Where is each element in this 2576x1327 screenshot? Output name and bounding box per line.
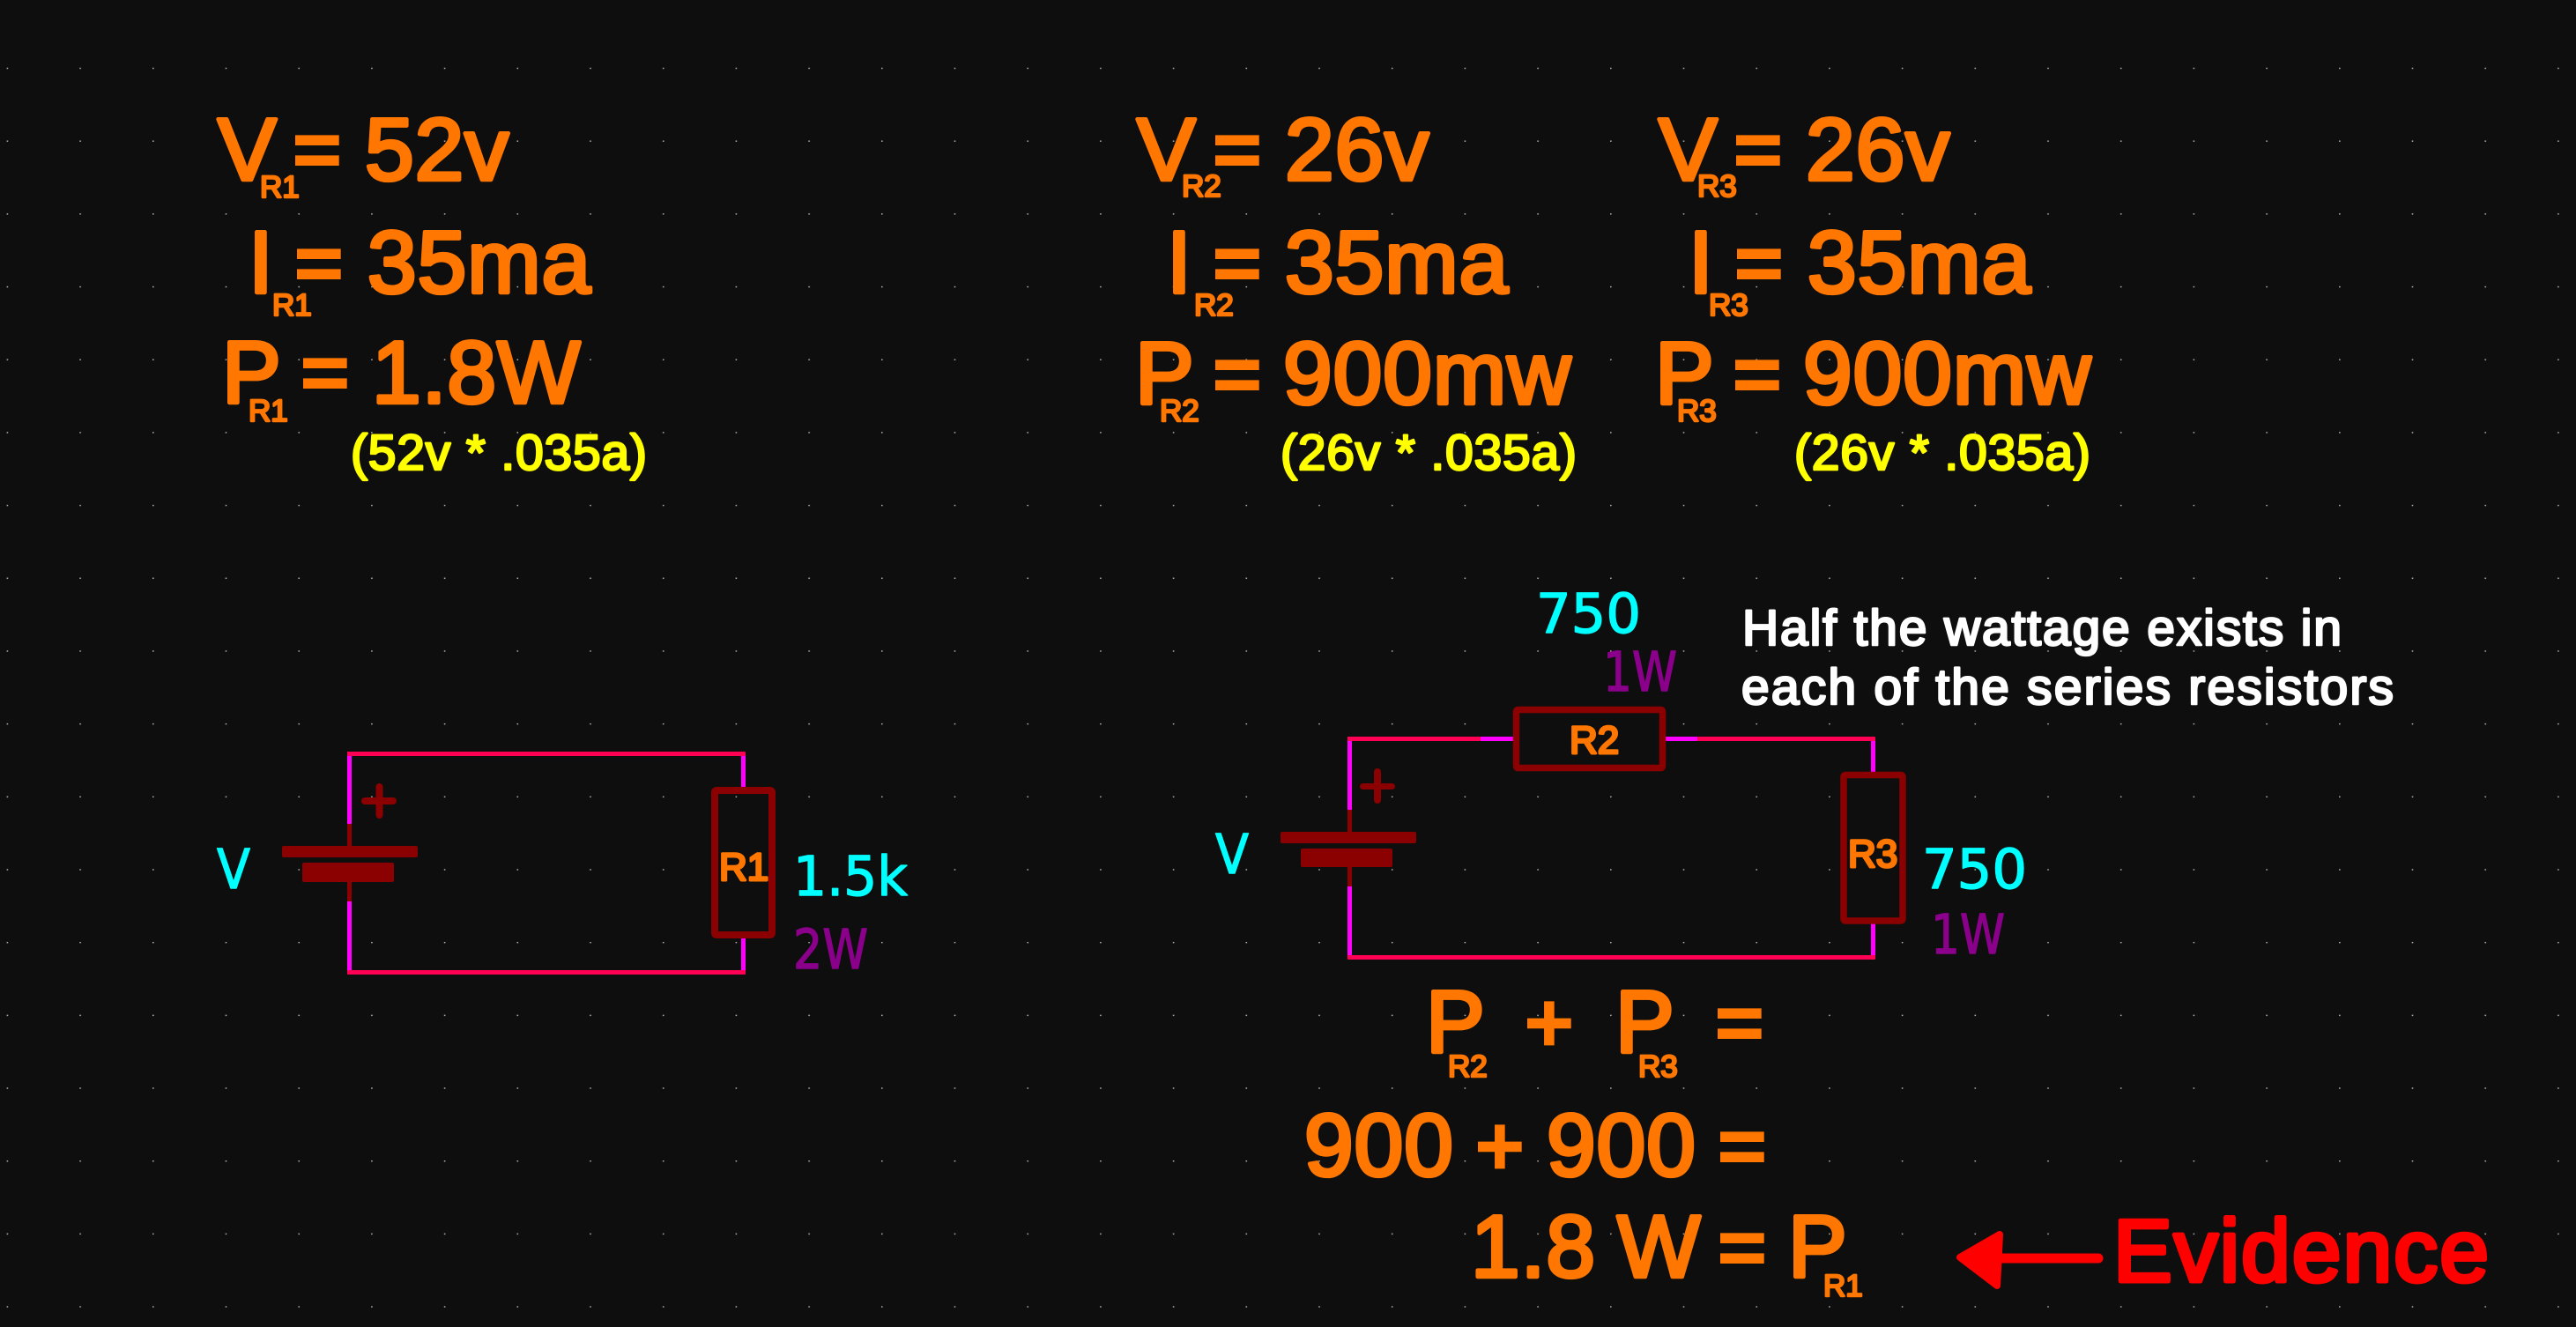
- note: half the wattage: [1741, 600, 2394, 715]
- V R2 equation: R2: [1182, 169, 1221, 204]
- equation: 900 + 900 =: 900: [1547, 1096, 1696, 1195]
- I R3 equation: R3: [1709, 288, 1748, 322]
- icon: battery: [282, 783, 418, 901]
- P R1 equation: R1: [249, 394, 288, 428]
- P R2 equation: [1135, 324, 1571, 428]
- V R1 equation: =: [293, 105, 341, 195]
- note: half the wattage: each of the series resistors: [1741, 659, 2394, 715]
- I R3 equation: [1689, 213, 2031, 322]
- equation: P R2 + P R3 =: R2: [1448, 1049, 1488, 1084]
- V R3 equation: 26v: [1806, 100, 1950, 199]
- P R3 equation: =: [1733, 330, 1781, 419]
- P R1 equation: [222, 323, 581, 428]
- P R2 equation: P: [1135, 324, 1195, 423]
- resistor R3: [1844, 775, 1903, 921]
- P R1 equation: P: [222, 323, 282, 422]
- R2 calculation note: (26v * .035a): [1281, 425, 1578, 481]
- P R3 equation: P: [1655, 324, 1715, 423]
- equation: P R2 + P R3 =: +: [1526, 978, 1573, 1068]
- R3 calculation note: (26v * .035a): [1794, 425, 2091, 481]
- V R2 equation: [1137, 100, 1429, 204]
- equation: 1.8 W = P R1: R1: [1823, 1269, 1863, 1303]
- icon: battery: [1281, 768, 1416, 886]
- panel: R2 values: [1135, 100, 1578, 481]
- equation: P R2 + P R3 =: =: [1716, 978, 1763, 1068]
- equation: 1.8 W = P R1: 1.8: [1471, 1197, 1596, 1296]
- resistor R3: R3: [1848, 833, 1897, 876]
- I R1 equation: =: [295, 219, 343, 308]
- equation: 900 + 900 =: +: [1476, 1101, 1524, 1191]
- I R2 equation: =: [1214, 219, 1261, 308]
- R1 calculation note: (52v * .035a): [351, 425, 648, 481]
- V R1 equation: R1: [260, 170, 300, 204]
- equation: 1.8 W = P R1: [1471, 1197, 1863, 1303]
- I R2 equation: I: [1167, 213, 1192, 312]
- P R1 equation: =: [301, 328, 349, 418]
- equation: P R2 + P R3 =: [1426, 973, 1763, 1084]
- equation: P R2 + P R3 =: R3: [1638, 1049, 1678, 1084]
- equation: 900 + 900 =: [1304, 1096, 1766, 1195]
- I R3 equation: I: [1689, 213, 1714, 312]
- V R3 equation: =: [1734, 105, 1782, 195]
- V R2 equation: =: [1214, 105, 1261, 195]
- P R2 equation: 900mw: [1283, 324, 1571, 423]
- V R3 equation: [1659, 100, 1950, 204]
- wires: [1347, 737, 1875, 960]
- equation: 900 + 900 =: 900: [1304, 1096, 1454, 1195]
- resistor R2: [1516, 710, 1662, 768]
- V R3 equation: V: [1659, 100, 1719, 199]
- panel: R1 values: [218, 100, 648, 481]
- wires: [347, 752, 746, 975]
- I R1 equation: R1: [272, 288, 312, 322]
- V R2 equation: 26v: [1285, 100, 1429, 199]
- label: R2 value 750: 750: [1536, 582, 1641, 646]
- equation: 1.8 W = P R1: P: [1788, 1197, 1848, 1296]
- I R2 equation: [1167, 213, 1509, 322]
- P R3 equation: [1655, 324, 2091, 428]
- I R1 equation: I: [249, 213, 274, 312]
- I R2 equation: 35ma: [1285, 213, 1509, 312]
- note: half the wattage: Half the wattage exists in: [1742, 600, 2342, 656]
- V R3 equation: R3: [1697, 169, 1737, 204]
- I R3 equation: 35ma: [1808, 213, 2031, 312]
- V R1 equation: [218, 100, 509, 204]
- resistor R2: R2: [1570, 719, 1619, 762]
- circuit: single resistor: [217, 752, 908, 982]
- label: R2 wattage 1W: 1W: [1603, 640, 1677, 704]
- circuit: two series resistors: [1215, 582, 2394, 967]
- I R2 equation: R2: [1194, 288, 1234, 322]
- resistor R1: [715, 790, 772, 935]
- arrow: pointing to equation: [1960, 1234, 2098, 1286]
- P R2 equation: =: [1214, 330, 1261, 419]
- label: V: V: [217, 837, 250, 901]
- label: R3 value 750: 750: [1922, 837, 2027, 901]
- label: 1.5k: 1.5k: [793, 844, 908, 908]
- P R3 equation: R3: [1677, 394, 1717, 428]
- equation: P R2 + P R3 =: P: [1426, 973, 1486, 1071]
- P R1 equation: 1.8W: [372, 323, 581, 422]
- I R3 equation: =: [1735, 219, 1783, 308]
- P R3 equation: 900mw: [1803, 324, 2091, 423]
- resistor R1: R1: [719, 846, 768, 889]
- equation: 1.8 W = P R1: =: [1719, 1203, 1766, 1293]
- I R1 equation: [249, 213, 591, 322]
- V R2 equation: V: [1137, 100, 1197, 199]
- equation: 1.8 W = P R1: W: [1617, 1197, 1701, 1296]
- panel: R3 values: [1655, 100, 2091, 481]
- V R1 equation: 52v: [365, 100, 509, 199]
- label: 2W: 2W: [793, 917, 868, 982]
- equation: 900 + 900 =: =: [1719, 1101, 1766, 1191]
- equation: P R2 + P R3 =: P: [1615, 973, 1675, 1071]
- label: V: V: [1215, 822, 1249, 886]
- P R2 equation: R2: [1160, 394, 1199, 428]
- label: Evidence: Evidence: [2113, 1202, 2489, 1301]
- I R1 equation: 35ma: [367, 213, 591, 312]
- V R1 equation: V: [218, 100, 278, 199]
- label: R3 wattage 1W: 1W: [1931, 902, 2005, 967]
- panel: power sum: [1304, 973, 1863, 1303]
